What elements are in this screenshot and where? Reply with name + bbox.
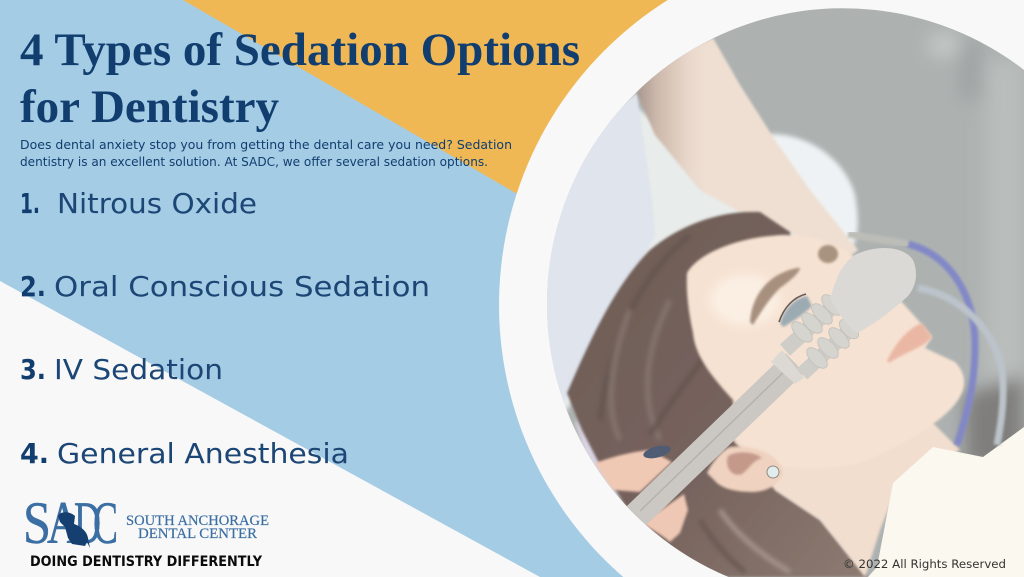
logo monogram: C bbox=[93, 490, 118, 556]
list item 1: Nitrous Oxide bbox=[57, 188, 257, 220]
photo background wall bbox=[540, 0, 1024, 577]
title: 4 Types of Sedation Options bbox=[20, 24, 580, 76]
breathing tubes bbox=[636, 363, 795, 516]
tagline: DOING DENTISTRY DIFFERENTLY bbox=[30, 554, 262, 570]
assistant arm bbox=[637, 38, 858, 265]
face bbox=[687, 235, 964, 469]
blue gas tube bbox=[908, 244, 975, 445]
grey gas tube bbox=[918, 288, 1003, 445]
title bbox=[20, 24, 580, 133]
headrest bbox=[770, 132, 860, 246]
fingernail bbox=[643, 446, 670, 458]
list item 4: 4. bbox=[20, 438, 49, 470]
logo wordmark: DENTAL CENTER bbox=[138, 526, 257, 542]
eyelashes bbox=[779, 294, 806, 322]
logo monogram: D bbox=[74, 490, 101, 556]
eye bbox=[780, 296, 812, 327]
list item 1: 1. bbox=[20, 188, 40, 220]
hair strands bbox=[600, 235, 790, 572]
logo wordmark bbox=[126, 513, 269, 542]
logo monogram bbox=[23, 490, 118, 556]
pale gown background bbox=[562, 108, 742, 412]
blue diagonal panel bbox=[0, 0, 700, 577]
neck and chest bbox=[733, 420, 960, 577]
logo: South Anchorage Dental Center bbox=[23, 490, 269, 556]
white ring around photo bbox=[499, 0, 1024, 577]
list item 3: IV Sedation bbox=[54, 354, 223, 386]
list item 3: 3. bbox=[20, 354, 46, 386]
lower fingers bbox=[642, 494, 688, 542]
title: for Dentistry bbox=[20, 81, 279, 133]
lavender pillow under hair bbox=[575, 420, 625, 500]
nasal mask bbox=[830, 248, 916, 333]
metal connector bbox=[848, 234, 908, 244]
ribbed section base bbox=[785, 305, 852, 374]
intro paragraph: Does dental anxiety stop you from getting the dental care you need? Sedation bbox=[20, 137, 512, 152]
blurred wall details bbox=[927, 33, 1024, 470]
intro paragraph: dentistry is an excellent solution. At SADC, we offer several sedation options. bbox=[20, 154, 488, 169]
ear bbox=[707, 447, 783, 492]
earring bbox=[767, 466, 779, 478]
far eye bbox=[818, 245, 838, 263]
lips bbox=[887, 323, 932, 363]
copyright: © 2022 All Rights Reserved bbox=[843, 557, 1006, 571]
logo monogram: A bbox=[47, 490, 80, 556]
gown collar bbox=[868, 427, 1024, 577]
photo: patient receiving nitrous oxide bbox=[540, 0, 1024, 577]
icon: ram silhouette bbox=[58, 512, 90, 548]
logo wordmark: SOUTH ANCHORAGE bbox=[126, 513, 269, 529]
list item 2: Oral Conscious Sedation bbox=[54, 271, 430, 303]
list item 4: General Anesthesia bbox=[57, 438, 349, 470]
inner ear bbox=[727, 452, 762, 475]
logo monogram: S bbox=[23, 490, 51, 556]
orange corner panel bbox=[170, 0, 720, 320]
tube clamp bbox=[771, 350, 804, 384]
eyebrow bbox=[750, 268, 800, 325]
holding hand bbox=[595, 450, 672, 492]
hair bbox=[567, 212, 868, 577]
gown front bbox=[547, 93, 653, 399]
forehead highlight bbox=[710, 274, 780, 326]
list item 2: 2. bbox=[20, 271, 46, 303]
ribbed section bbox=[791, 294, 859, 369]
intro paragraph bbox=[20, 137, 512, 169]
